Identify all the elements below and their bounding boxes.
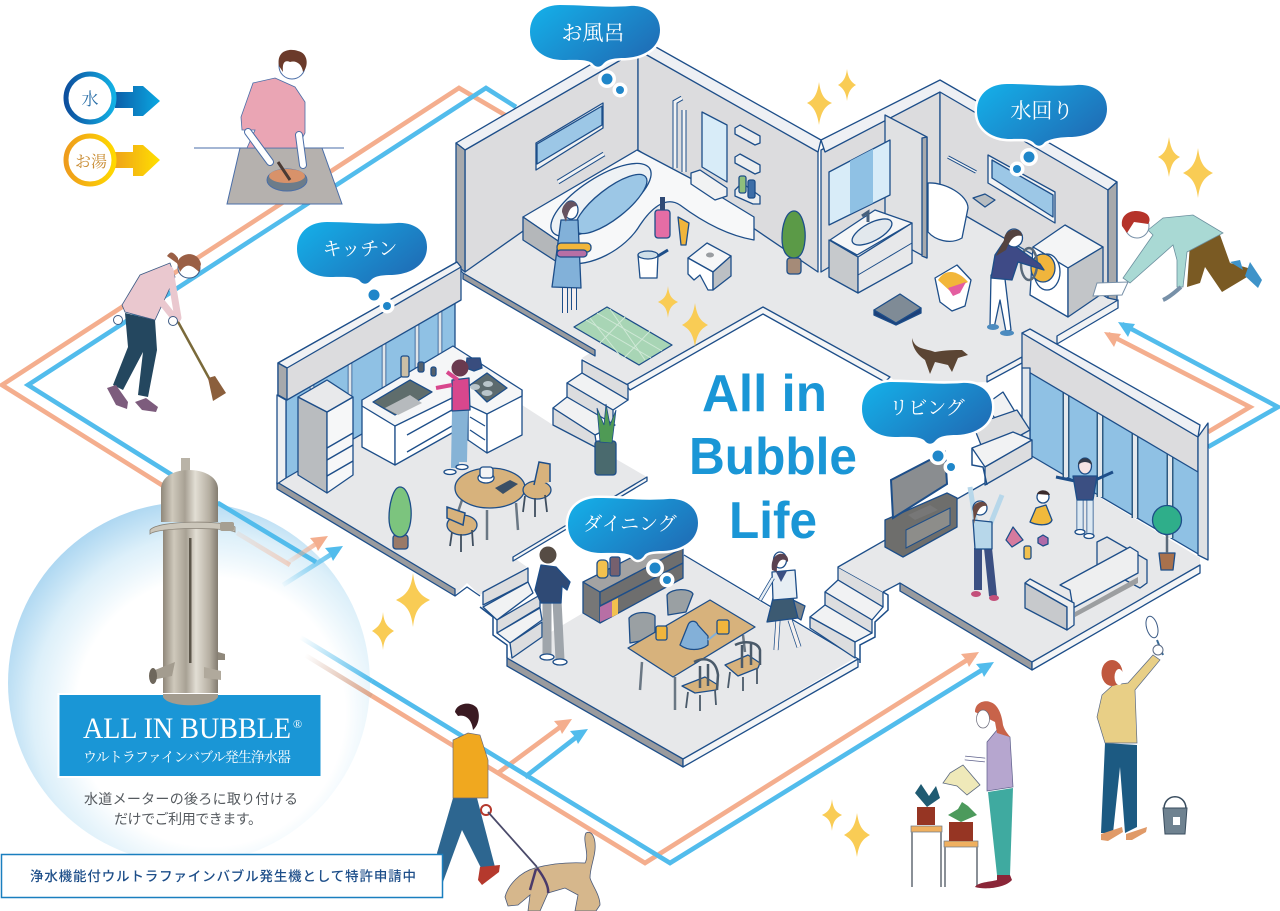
- dog on leash: [505, 832, 600, 911]
- person: woman sweeping: [107, 252, 226, 412]
- house: living room: [838, 329, 1208, 670]
- kitchen windows: [277, 262, 461, 484]
- woman cooking in kitchen: [436, 360, 470, 474]
- woman at washer: [987, 229, 1044, 336]
- boy with arms spread: [1056, 458, 1113, 538]
- bathroom window: [536, 103, 603, 170]
- callout: water area: [977, 84, 1107, 176]
- plant: snake plant: [595, 404, 616, 475]
- plant stands: [911, 784, 978, 887]
- dining stairs left: [480, 568, 542, 658]
- callout: living: [862, 382, 992, 474]
- person: man with duster: [1097, 615, 1187, 841]
- schoolgirl: [760, 552, 805, 650]
- sofa: [1025, 537, 1147, 630]
- title: [689, 365, 857, 550]
- stairs: center top: [553, 360, 628, 448]
- house: bathroom and washroom floor: [456, 37, 1118, 390]
- washroom window: [948, 155, 1055, 223]
- plant: bathroom: [782, 211, 805, 274]
- fridge: [298, 380, 353, 493]
- legend: [66, 74, 160, 184]
- plant: living room: [1152, 506, 1182, 570]
- shower, rail and shelves: [558, 98, 760, 204]
- product name box: ®: [293, 717, 302, 731]
- callout: kitchen: [297, 222, 427, 314]
- person: man cooking: [194, 50, 344, 204]
- person: man walking dog: [437, 704, 600, 911]
- bath goods: bottle, tube, pail, stool: [638, 197, 731, 290]
- washing machine: [1021, 225, 1103, 317]
- dog: small brown: [912, 338, 968, 374]
- man on phone: [535, 546, 570, 665]
- vanity unit: [829, 140, 912, 293]
- dining stairs right: [810, 567, 888, 663]
- callout: dining: ダイニング: [583, 513, 677, 535]
- toilet: [928, 183, 995, 241]
- bookshelf: [583, 540, 683, 623]
- title: All in: [702, 365, 827, 423]
- television: [885, 452, 957, 557]
- title: Bubble: [689, 428, 857, 486]
- callout: water area: 水回り: [1010, 99, 1074, 123]
- laundry basket: [935, 265, 971, 311]
- legend: water: 水: [82, 90, 98, 109]
- living stairs: [972, 392, 1032, 485]
- person: woman watering plants: [911, 701, 1013, 888]
- partition wall: [885, 115, 927, 258]
- folded mat: [874, 294, 921, 325]
- product caption: 水道メーターの後ろに取り付ける: [84, 791, 298, 807]
- panel: product sphere: [8, 458, 372, 864]
- sparkles: [372, 69, 1213, 857]
- living windows and wall: [1022, 329, 1208, 560]
- product name box: [58, 694, 322, 777]
- kitchen counter: [362, 346, 522, 465]
- bathroom walls: [456, 37, 821, 273]
- product name box: ウルトラファインバブル発生浄水器: [83, 749, 291, 766]
- dining table and chairs: [628, 590, 760, 711]
- product caption: だけでご利用できます。: [114, 811, 262, 827]
- pipes fading through the sphere: [218, 503, 372, 696]
- product caption: [84, 791, 298, 827]
- legend: hot water: お湯: [75, 153, 107, 171]
- bathtub: [523, 150, 754, 264]
- callout: living: リビング: [889, 397, 965, 419]
- plant: kitchen: [389, 487, 411, 549]
- callout: dining: [568, 498, 698, 588]
- bath mat: [574, 307, 672, 365]
- title: Life: [729, 492, 817, 550]
- person: crawling man wiping: [1093, 211, 1262, 300]
- house: kitchen: [277, 262, 647, 596]
- callout: bath: [530, 5, 660, 98]
- bucket: [1163, 797, 1187, 834]
- woman in blue dress: [552, 201, 591, 313]
- child with raised arms: [970, 487, 1002, 601]
- patent notice: 浄水機能付ウルトラファインバブル発生機として特許申請中: [30, 868, 416, 884]
- product name box: ALL IN BUBBLE: [83, 712, 291, 745]
- callout: kitchen: キッチン: [323, 239, 397, 260]
- round table and chairs: [447, 462, 551, 552]
- callout: bath: お風呂: [562, 21, 624, 45]
- product: stainless water purifier: [149, 458, 235, 704]
- house: dining: [480, 540, 888, 767]
- washroom walls: [821, 80, 1117, 300]
- toddler and toys: [1006, 490, 1052, 559]
- patent notice: [2, 854, 442, 898]
